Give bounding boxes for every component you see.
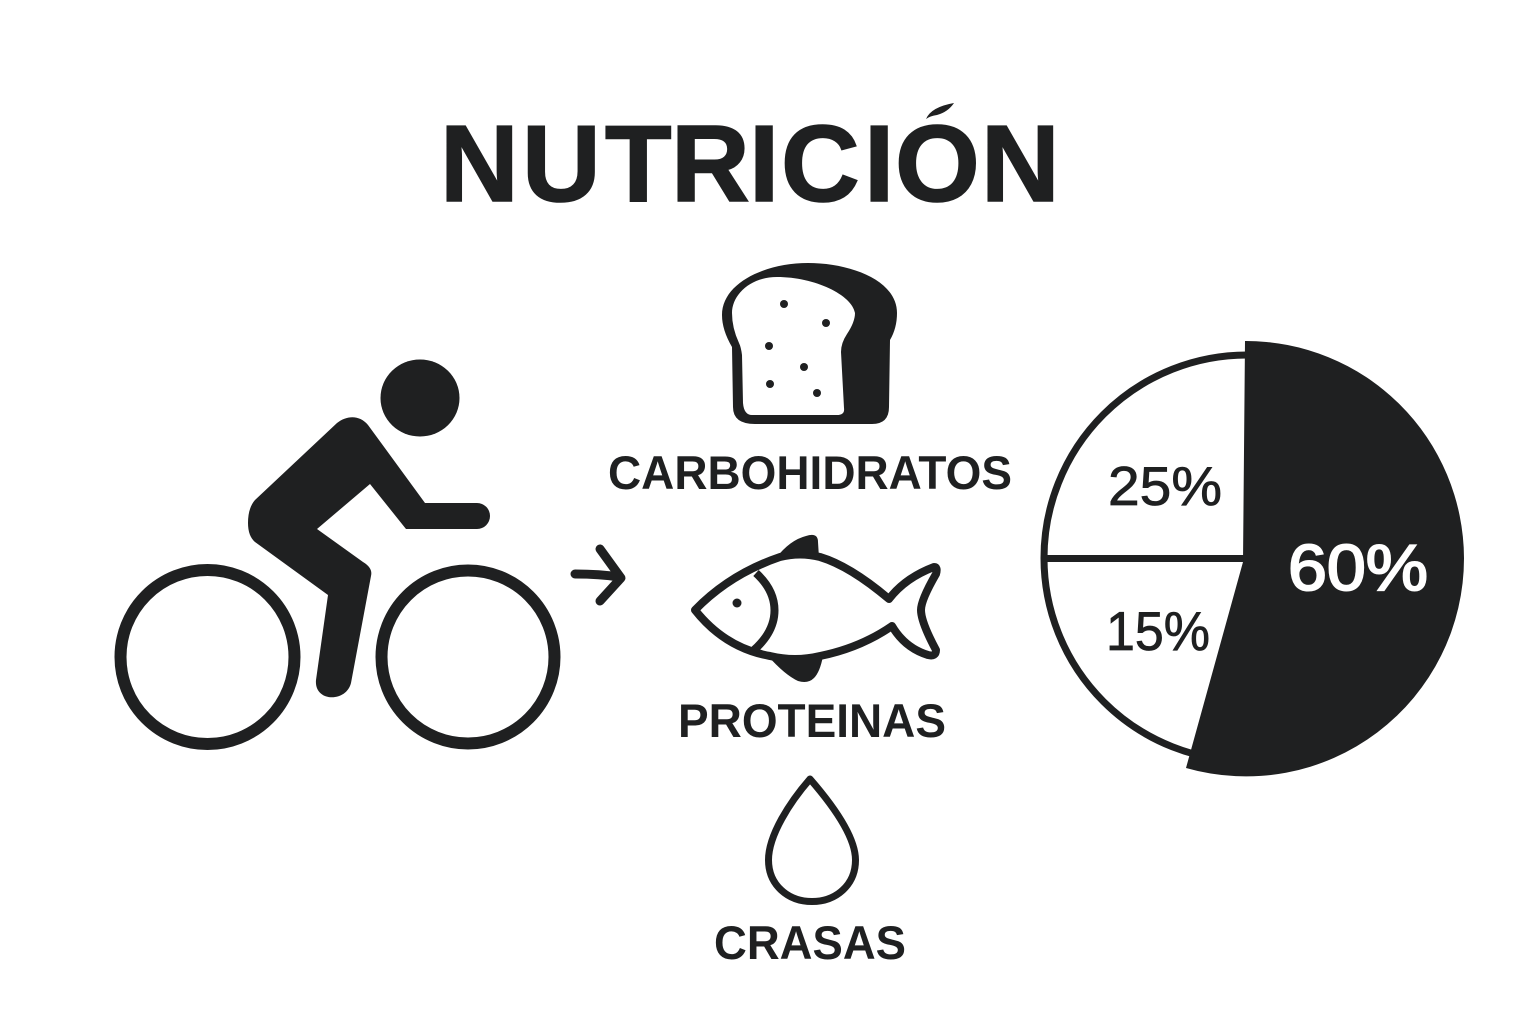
pie outline — [1044, 355, 1450, 761]
label: carbohidratos: CARBOHIDRATOS — [608, 446, 1012, 499]
value: 15%: 15% — [1106, 600, 1210, 662]
icon: bread — [722, 263, 897, 424]
icon: fat drop — [768, 779, 856, 902]
label: proteinas: PROTEINAS — [678, 694, 946, 747]
label: crasas: CRASAS — [714, 916, 906, 969]
pie chart — [1044, 341, 1464, 776]
divider line — [1044, 555, 1245, 562]
right wheel — [382, 570, 554, 744]
slice: 60% — [1186, 341, 1464, 776]
title: NUTRICIÓN — [440, 103, 1060, 225]
value: 60%: 60% — [1288, 531, 1428, 604]
value: 25%: 25% — [1108, 455, 1222, 517]
cyclist head — [380, 360, 460, 436]
left wheel — [120, 570, 294, 744]
icon: fish — [695, 535, 937, 682]
icon: cyclist — [120, 360, 554, 744]
cyclist body — [248, 417, 490, 697]
arrow — [575, 549, 621, 601]
